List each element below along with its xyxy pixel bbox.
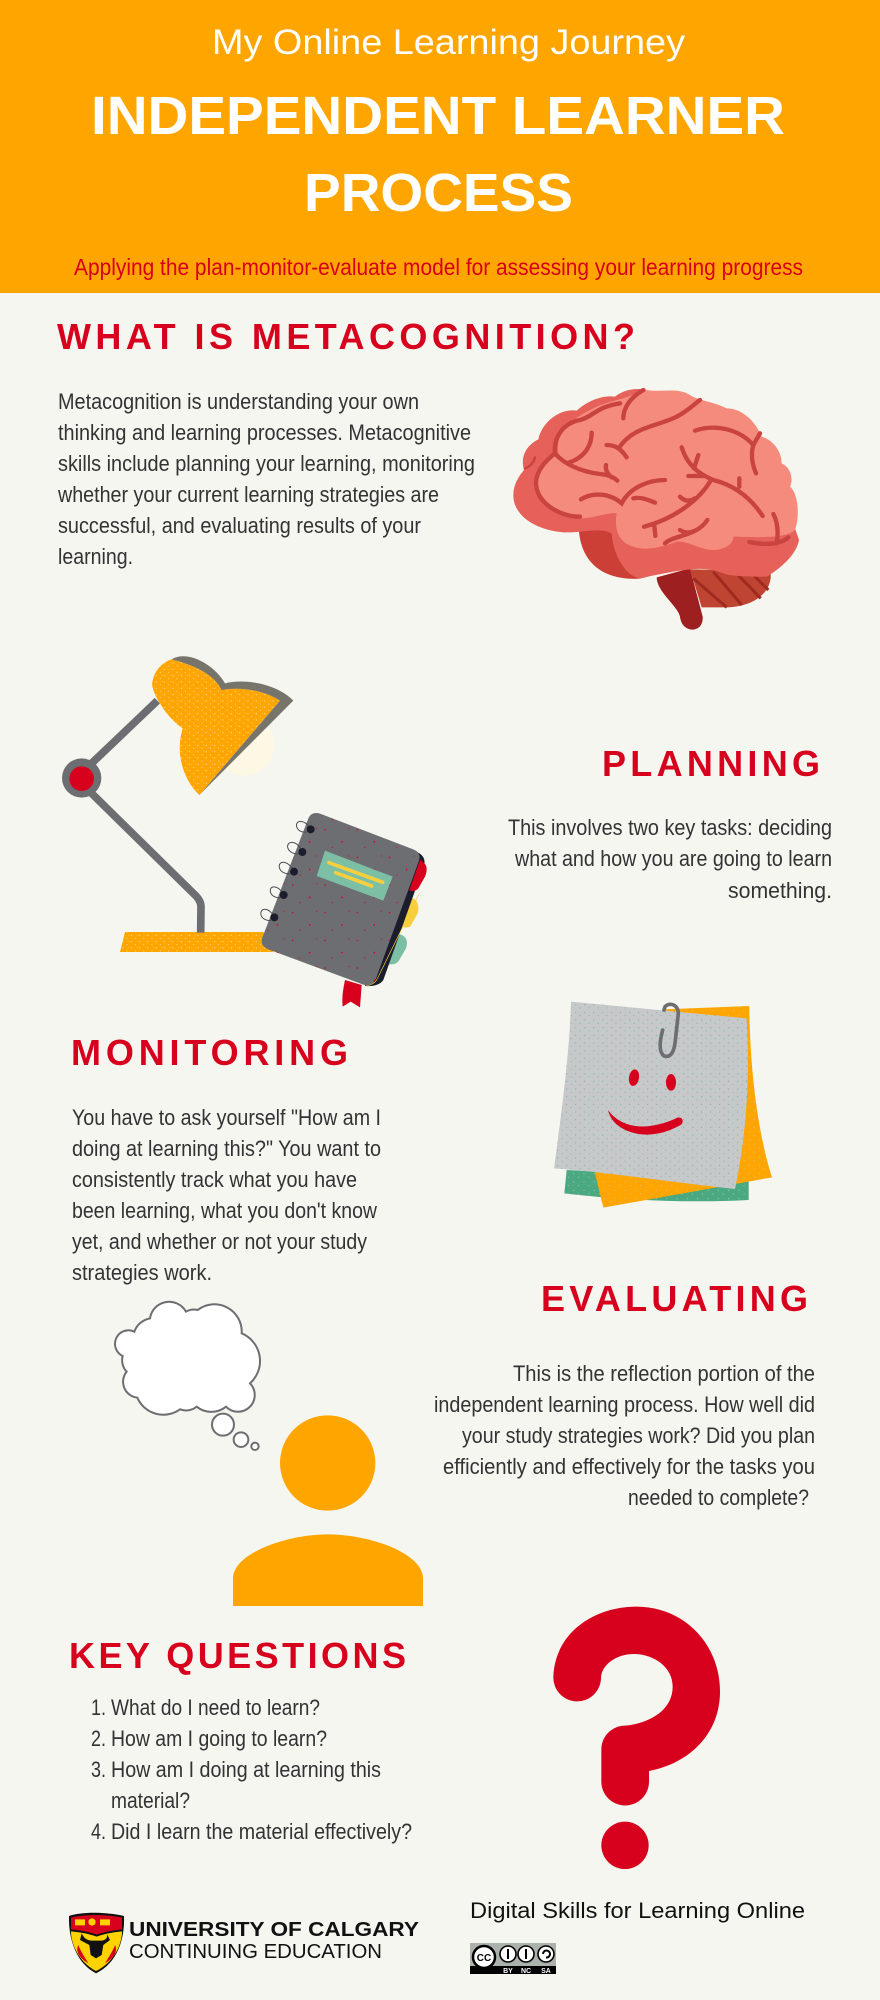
logo: university of calgary [69,1913,420,1973]
text: metacognition description: thinking and learning processes. Metacognitive [58,420,471,445]
icon: question mark [553,1607,720,1869]
list: key questions: What do I need to learn? [111,1695,320,1720]
badge: creative commons [470,1943,556,1975]
text: metacognition description: learning. [58,544,133,569]
text: planning description [508,815,832,903]
list: key questions: 4. [91,1819,106,1844]
heading: planning: PLANNING [602,743,820,784]
heading: monitoring: MONITORING [71,1032,348,1073]
list: key questions: How am I going to learn? [111,1726,327,1751]
text: monitoring description: been learning, what you don't know [72,1198,377,1223]
badge: creative commons: SA [541,1968,551,1975]
lamp arms [92,701,201,933]
text: monitoring description: You have to ask yourself "How am I [72,1105,381,1130]
icon: person with thought bubble [115,1302,423,1606]
list: key questions: 1. [91,1695,106,1720]
text: monitoring description: doing at learning this?" You want to [72,1136,381,1161]
list: key questions: 3. [91,1757,106,1782]
text: evaluating description [434,1361,815,1510]
text: evaluating description: This is the reflection portion of the [513,1361,815,1386]
heading: key questions: KEY QUESTIONS [69,1635,406,1676]
logo: university of calgary: CONTINUING EDUCATION [129,1941,382,1963]
icon: desk lamp and notebook [62,656,427,1007]
text: monitoring description: strategies work. [72,1260,212,1285]
list: key questions: material? [111,1788,190,1813]
list: key questions: Did I learn the material effectively? [111,1819,412,1844]
text: metacognition description [57,389,475,569]
text: evaluating description: independent learning process. How well did [434,1392,815,1417]
icon: brain [513,389,799,630]
footer text: digital skills: Digital Skills for Learning Online [470,1898,805,1923]
kicker: My Online Learning Journey: My Online Learning Journey [212,23,686,62]
list: key questions: 2. [91,1726,106,1751]
text: metacognition description: successful, and evaluating results of your [58,513,421,538]
person [233,1415,423,1606]
text: evaluating description: your study strategies work? Did you plan [462,1423,815,1448]
text: metacognition description: skills include planning your learning, monitoring [58,451,475,476]
text: evaluating description: efficiently and effectively for the tasks you [443,1454,815,1479]
smiley face [608,1069,683,1135]
badge: creative commons: BY [503,1968,513,1975]
text: planning description: what and how you are going to learn [514,846,832,871]
heading: what is metacognition: WHAT IS METACOGNITION? [57,316,635,357]
lamp base [120,932,273,952]
text: planning description: something. [728,878,832,903]
text: planning description: This involves two key tasks: deciding [508,815,832,840]
list: key questions [91,1695,412,1844]
badge: creative commons: NC [521,1968,531,1975]
lamp shade [152,659,280,795]
subtitle: Applying the plan-monitor-evaluate model for assessing your learning progress [74,254,803,280]
logo: university of calgary: UNIVERSITY OF CALGARY [129,1919,420,1941]
text: metacognition description: Metacognition is understanding your own [58,389,419,414]
text: monitoring description [72,1105,381,1285]
icon: shield [69,1913,124,1973]
title [91,86,785,223]
badge: creative commons: CC [477,1953,491,1964]
bulb glow [213,714,274,776]
text: monitoring description: yet, and whether or not your study [72,1229,367,1254]
notebook [261,813,427,1007]
header banner [0,0,880,293]
icon: sticky notes with smiley [554,1002,772,1208]
text: metacognition description: whether your current learning strategies are [57,482,439,507]
thought bubble [115,1302,260,1450]
title: PROCESS [304,163,573,223]
list: key questions: How am I doing at learning this [111,1757,381,1782]
title: INDEPENDENT LEARNER [91,86,785,146]
heading: evaluating: EVALUATING [541,1278,808,1319]
text: evaluating description: needed to complete? [628,1485,809,1510]
text: monitoring description: consistently track what you have [72,1167,357,1192]
paperclip [660,1004,678,1056]
